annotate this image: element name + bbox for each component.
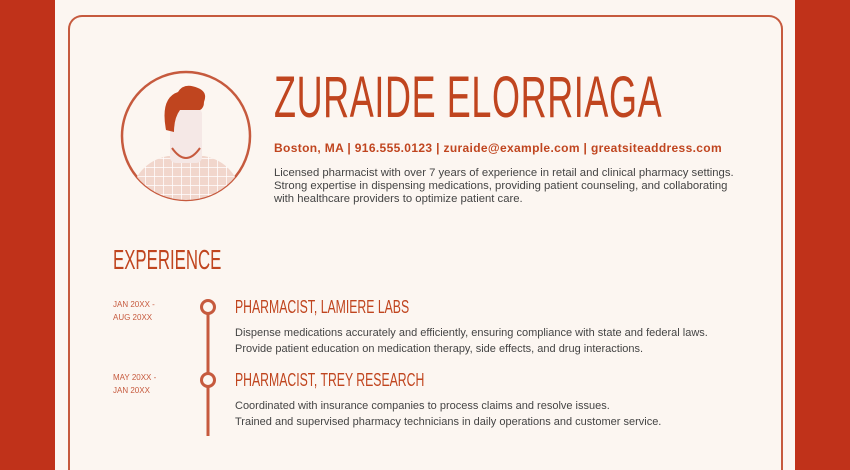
dates 1	[113, 300, 155, 322]
summary: Strong expertise in dispensing medications, providing patient counseling, and collaborating	[274, 180, 727, 192]
job 1 description: Provide patient education on medication therapy, side effects, and drug interactions.	[235, 343, 643, 355]
contact line: Boston, MA | 916.555.0123 | zuraide@example.com | greatsiteaddress.com	[274, 141, 722, 155]
job 2 description: Trained and supervised pharmacy technicians in daily operations and customer service.	[235, 416, 661, 428]
heading: experience: EXPERIENCE	[113, 244, 221, 275]
job 2 description	[235, 400, 661, 428]
job 1 description: Dispense medications accurately and efficiently, ensuring compliance with state and federal laws.	[235, 327, 708, 339]
summary: Licensed pharmacist with over 7 years of experience in retail and clinical pharmacy settings.	[274, 167, 734, 179]
job 1 description	[235, 327, 708, 355]
job 1 title: PHARMACIST, LAMIERE LABS	[235, 297, 409, 317]
dates 1: AUG 20XX	[113, 313, 152, 322]
job 2 description: Coordinated with insurance companies to process claims and resolve issues.	[235, 400, 610, 412]
dates 2	[113, 373, 156, 395]
summary	[274, 167, 734, 205]
dates 2: JAN 20XX	[113, 386, 150, 395]
timeline	[200, 299, 216, 436]
summary: with healthcare providers to optimize patient care.	[274, 193, 523, 205]
dates 2: MAY 20XX -	[113, 373, 156, 382]
dates 1: JAN 20XX -	[113, 300, 155, 309]
name: ZURAIDE ELORRIAGA	[274, 65, 662, 130]
avatar	[120, 70, 252, 202]
job 2 title: PHARMACIST, TREY RESEARCH	[235, 370, 424, 390]
